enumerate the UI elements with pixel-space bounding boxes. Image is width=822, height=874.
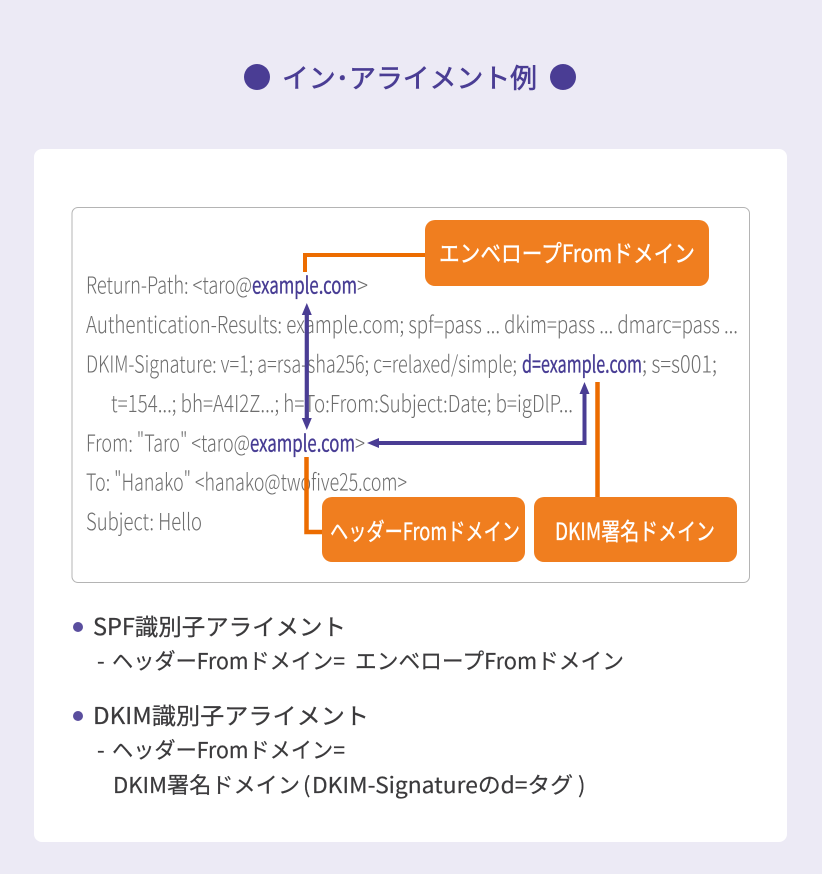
text block: SPF alignment: ヘッダーFromドメイン= [112,644,345,676]
text block: DKIM alignment: DKIM署名ドメイン [113,768,300,800]
text block: DKIM alignment: ) [578,768,585,800]
text block: DKIM alignment: DKIM-Signatureのd=タグ [312,768,573,800]
arrow: return-path to from [302,303,312,430]
label: envelope From domain [425,220,709,286]
text block: DKIM alignment [73,697,585,800]
label: header From domain [322,497,525,562]
email header text: DKIM-Signature: v=1; a=rsa-sha256; c=relaxed/simple; [86,346,517,380]
email header text: Return-Path: <taro@ [86,266,252,300]
title: イン･アライメント例 [282,57,537,96]
text block: SPF alignment: エンベロープFromドメイン [355,644,624,676]
email header text: t=154...; bh=A4I2Z...; h=To:From:Subject:Date; b=igDlP... [111,385,573,419]
panel: email header box [72,208,750,582]
arrow: header From connector [306,457,322,532]
label: header From domain: ヘッダーFromドメイン [330,512,520,547]
email header text [86,266,738,537]
text block: DKIM alignment: DKIM識別子アライメント [93,697,369,731]
text block: SPF alignment: SPF識別子アライメント [93,608,346,642]
email header text: To: "Hanako" <hanako@twofive25.com> [86,464,407,498]
text block: DKIM alignment: - [97,733,105,765]
label: DKIM signature domain: DKIM署名ドメイン [555,512,715,547]
text block: SPF alignment [73,608,624,676]
email header text: > [357,266,368,300]
email header text: d=example.com [522,346,642,380]
text block: DKIM alignment: ヘッダーFromドメイン= [112,733,345,765]
text block: SPF alignment: - [97,644,105,676]
email header text: From: "Taro" <taro@ [86,424,250,458]
email header text: example.com [252,266,357,300]
arrow: DKIM connector [595,382,600,497]
text block: DKIM alignment: ( [303,768,310,800]
email header text: example.com [250,424,355,458]
email header text: Subject: Hello [86,503,202,537]
label: DKIM signature domain [534,497,737,562]
arrow: envelope From connector [305,255,425,272]
email header text: > [355,424,365,458]
label: envelope From domain: エンベロープFromドメイン [439,234,695,269]
email header text: ; s=s001; [642,346,717,380]
panel: white card [34,149,787,842]
arrow: from to dkim signature [367,382,590,448]
